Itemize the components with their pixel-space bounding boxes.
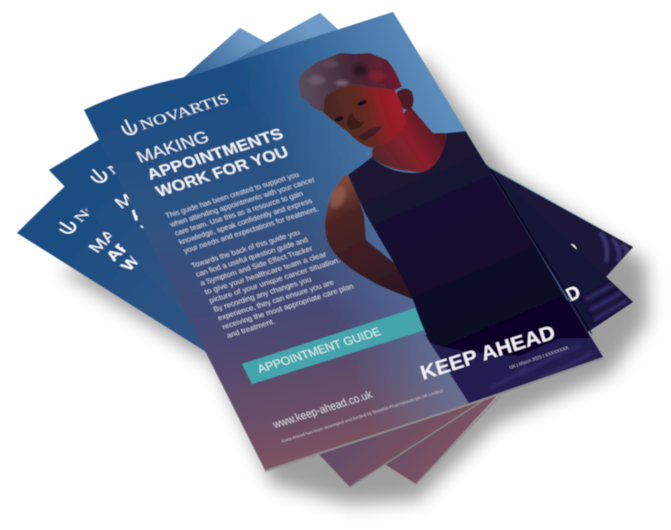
paragraph one: when attending appointments with your cancer xyxy=(167,175,317,229)
paragraph one xyxy=(163,166,330,255)
page background xyxy=(84,12,603,470)
brochure: front sheet xyxy=(84,12,606,471)
middle sheet logo and heading: MAKING xyxy=(111,161,188,212)
heading: WORK FOR YOU xyxy=(153,144,292,201)
brochure: back sheet xyxy=(17,28,633,484)
logo: Novartis xyxy=(120,89,232,138)
back sheet logo and heading: WORK FOR YOU xyxy=(118,172,233,274)
paragraph two: Towards the back of this guide you xyxy=(190,228,301,270)
paragraph two xyxy=(190,220,359,340)
text block: front page copy xyxy=(118,70,445,444)
paragraph two: to give your healthcare team a clear xyxy=(203,250,328,296)
middle sheet fabric folds xyxy=(585,284,628,320)
paragraph one: your needs and expectations for treatment. xyxy=(182,204,320,255)
neck xyxy=(372,106,447,172)
fabric folds xyxy=(490,345,592,388)
brochure: middle sheet xyxy=(49,13,633,487)
middle sheet keep ahead mark: AD xyxy=(550,282,584,313)
logo: Novartis: NOVARTIS xyxy=(137,91,232,133)
shirt xyxy=(348,131,590,356)
sheet separation line xyxy=(490,168,592,334)
hair highlights xyxy=(307,60,387,86)
paragraph two: experience, they can ensure you are xyxy=(216,278,335,322)
back sheet logo and heading: APPOINTMENTS xyxy=(103,160,221,264)
ear xyxy=(397,88,414,110)
paragraph two: a Symptom and Side Effect Tracker xyxy=(198,244,314,287)
back sheet logo and heading: NOVARTIS xyxy=(71,156,150,225)
back sheet fabric folds xyxy=(600,232,627,262)
paragraph two: picture of your unique cancer situation. xyxy=(207,255,342,305)
middle sheet logo and heading: WORK FOR YOU xyxy=(139,156,269,237)
heading: APPOINTMENTS xyxy=(144,126,287,184)
middle sheet logo and heading: APPOINTMENTS xyxy=(126,142,260,224)
website: www.keep-ahead.co.uk xyxy=(270,389,375,431)
heading xyxy=(133,107,295,201)
page edge xyxy=(265,358,603,471)
back sheet logo and heading: MAKING xyxy=(84,196,155,256)
middle sheet logo and heading xyxy=(87,102,272,238)
paragraph one: care team. Use this as a resource to gain xyxy=(173,189,305,238)
jeans xyxy=(425,300,606,405)
paragraph two: By recording any changes you xyxy=(212,275,313,314)
nose xyxy=(348,112,364,130)
face xyxy=(323,85,406,148)
middle sheet figure area xyxy=(470,150,633,367)
funding note: Keep Ahead has been developed and funded by Novartis Pharmaceuticals UK Limited. xyxy=(280,388,445,444)
drop shadow of the brochure stack xyxy=(60,60,648,504)
back sheet keep ahead mark: D xyxy=(560,239,583,264)
heading: MAKING xyxy=(133,127,212,167)
paragraph one: This guide has been created to support you xyxy=(164,170,301,220)
lips xyxy=(358,126,382,141)
photo: woman xyxy=(298,53,606,405)
page highlight xyxy=(84,12,603,470)
back sheet figure area xyxy=(470,150,633,333)
eyes xyxy=(334,99,367,123)
button: appointment guide xyxy=(242,308,425,384)
paragraph two: receiving the most appropriate care plan xyxy=(220,282,355,331)
paragraph two: can find a useful question guide and xyxy=(194,235,310,279)
back sheet page edge xyxy=(416,396,500,484)
reference code: UK | March 2025 | XXXXXXXX xyxy=(509,345,569,370)
hair xyxy=(298,53,402,112)
paragraph one: knowledge, speak confidently and express xyxy=(177,196,314,246)
back sheet logo and heading xyxy=(55,131,236,275)
arm xyxy=(325,175,414,300)
middle sheet page edge xyxy=(350,396,490,487)
logo: keep ahead: KEEP AHEAD xyxy=(418,322,558,385)
paragraph two: and treatment. xyxy=(225,317,277,340)
button: appointment guide: APPOINTMENT GUIDE xyxy=(255,325,383,376)
shoulder highlight xyxy=(328,186,347,209)
middle sheet logo and heading: NOVARTIS xyxy=(105,122,193,178)
